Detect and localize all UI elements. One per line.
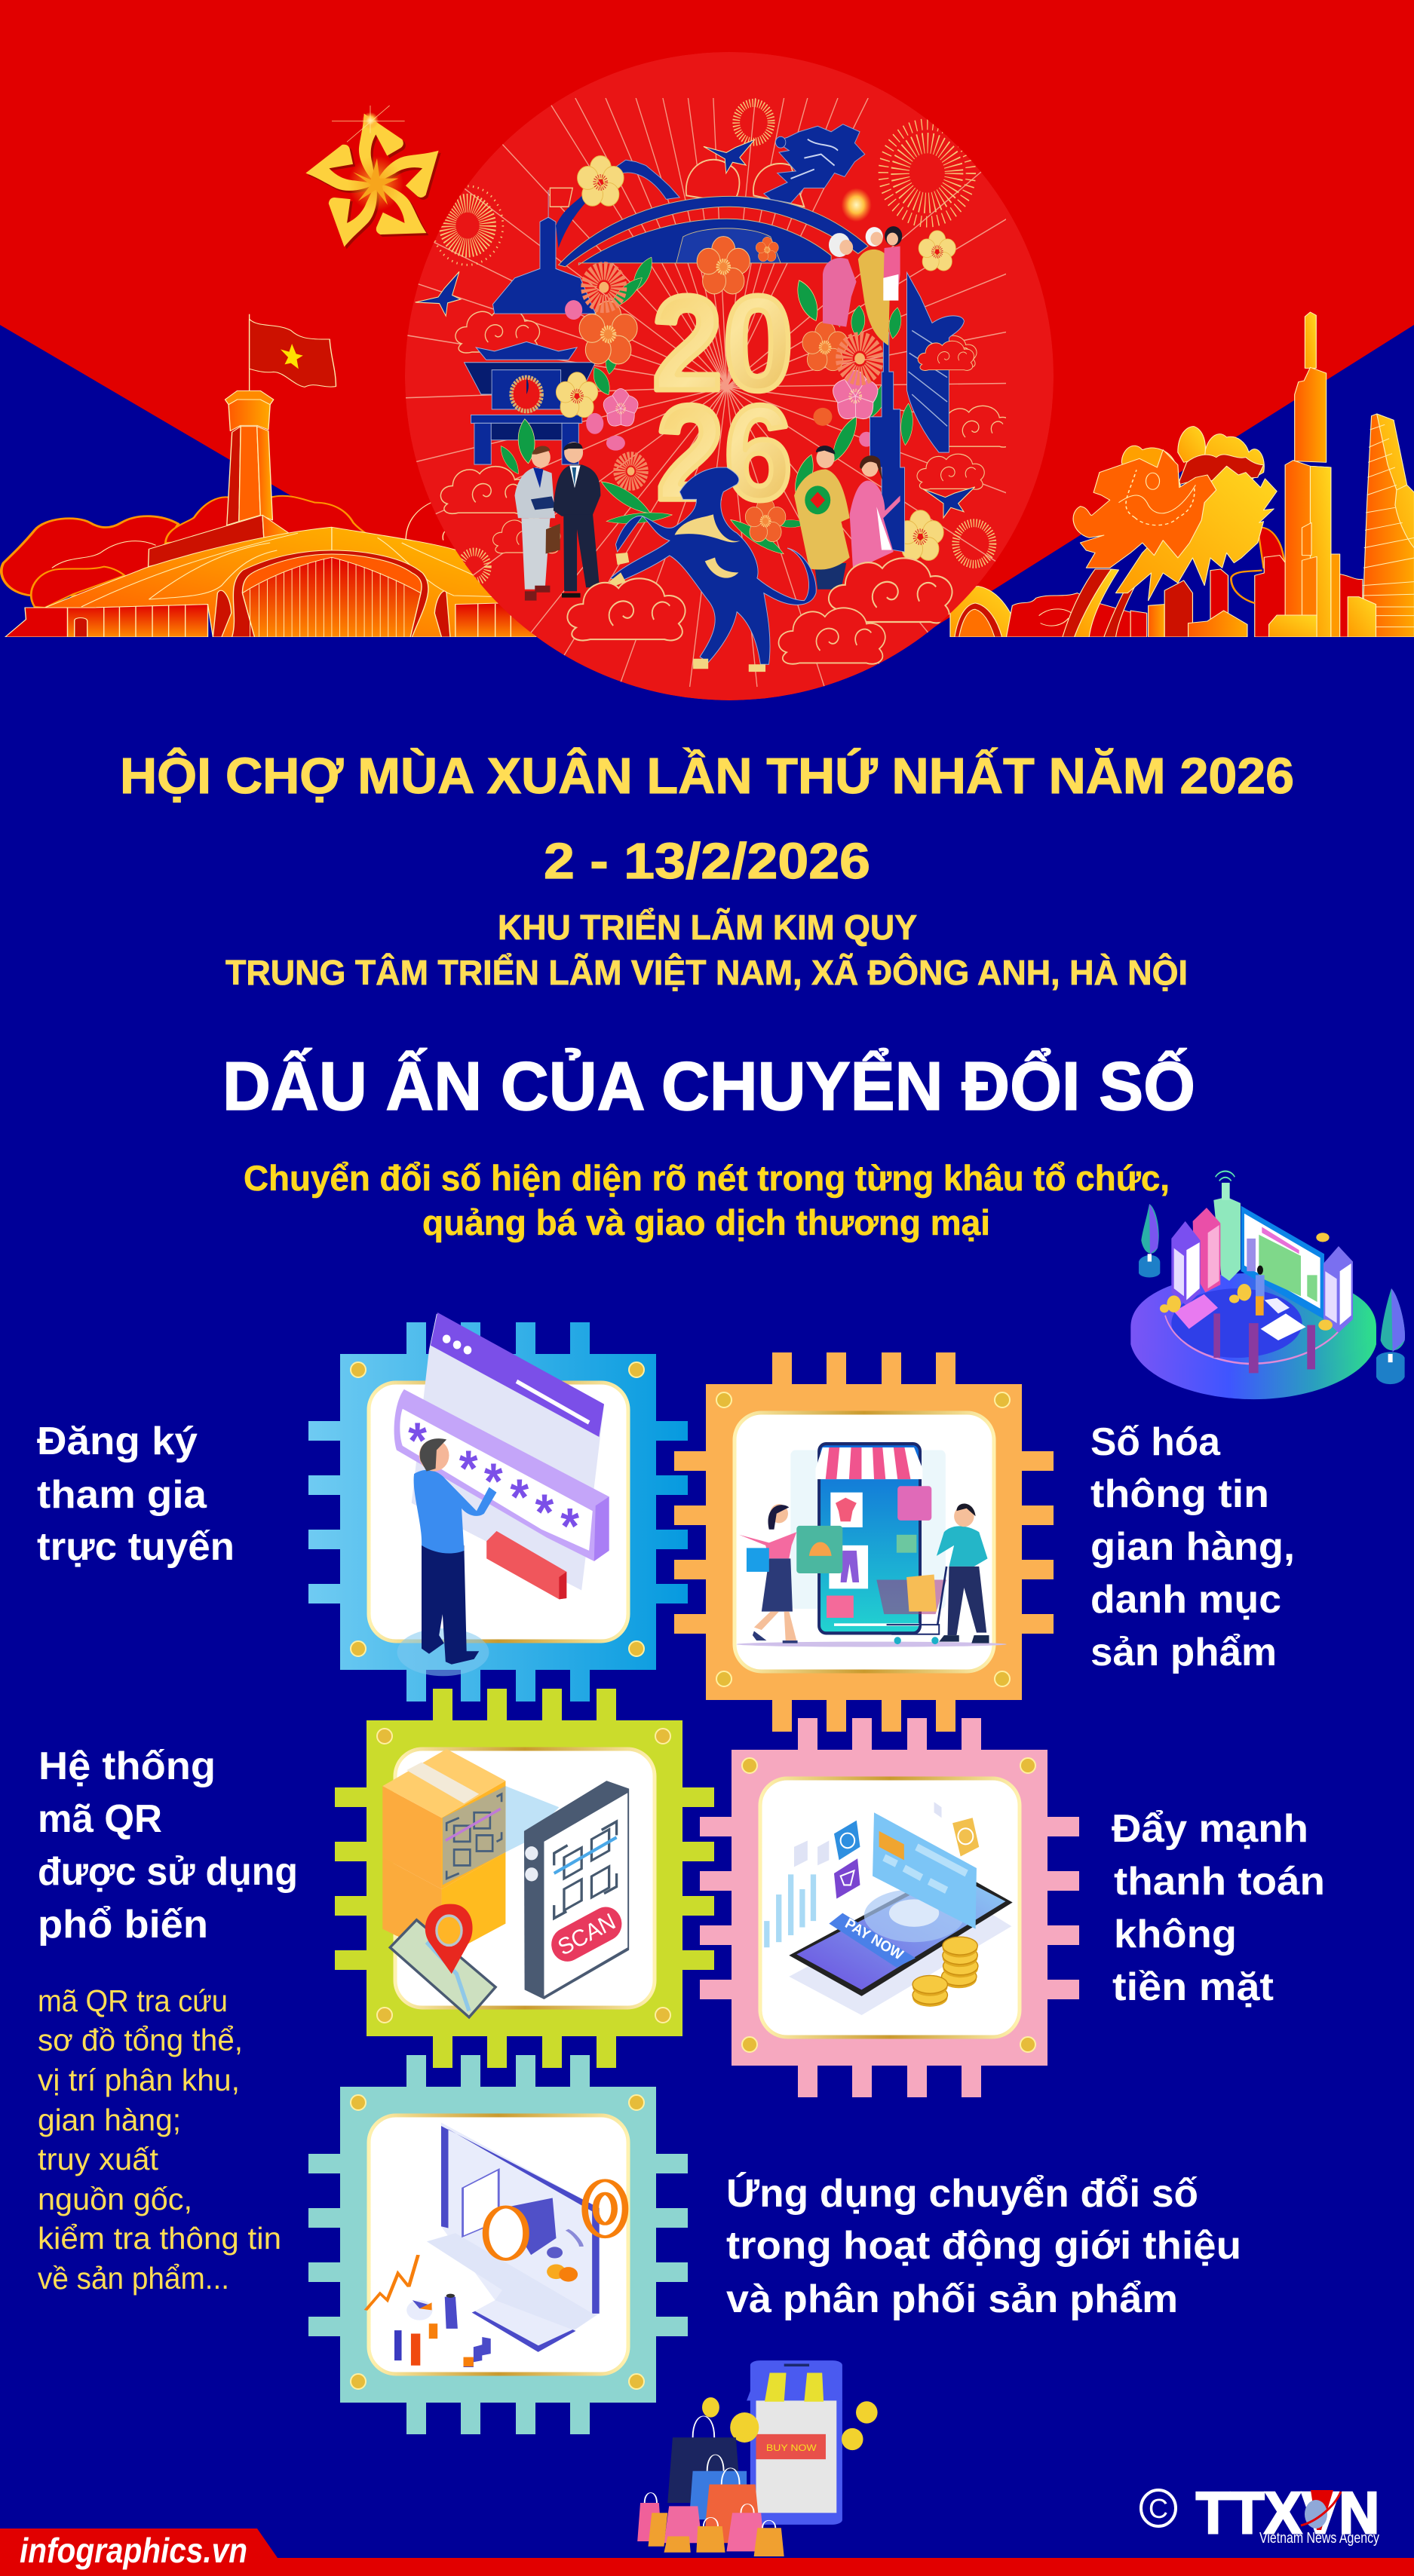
title: fair name: HỘI CHỢ MÙA XUÂN LẦN THỨ NHẤT NĂM 2026 [120, 748, 1294, 804]
icon: online registration person with password form [394, 1313, 609, 1676]
label: digitised stalls: Số hóa [1090, 1420, 1221, 1464]
label: product promotion: Ứng dụng chuyển đổi số [726, 2172, 1198, 2216]
label: cashless payment: không [1114, 1913, 1237, 1956]
arch roof of the exhibition centre [559, 196, 868, 267]
note: QR code uses [38, 1983, 281, 2296]
landmark: flag tower and exhibition hall (left skyline) [2, 314, 540, 637]
businessmen [514, 442, 600, 601]
main heading: DẤU ẤN CỦA CHUYỂN ĐỔI SỐ [222, 1048, 1195, 1125]
flag tower, blue [492, 190, 596, 314]
chip frame: lime [335, 1689, 714, 2068]
couple in ao dai [794, 446, 900, 590]
date: 2 - 13/2/2026 [544, 833, 870, 890]
label: digitised stalls: danh mục [1090, 1578, 1281, 1622]
intro text: Chuyển đổi số hiện diện rõ nét trong từng khâu tổ chức, [244, 1158, 1170, 1198]
venue: KHU TRIỂN LÃM KIM QUY [498, 908, 917, 947]
label: QR code system: phổ biến [38, 1903, 208, 1947]
note: QR code uses: sơ đồ tổng thể, [38, 2023, 243, 2057]
label: online registration [37, 1420, 235, 1569]
landmark: lion head and towers (right skyline) [950, 312, 1414, 637]
icon: online registration person with password form: * [560, 1498, 580, 1554]
label: cashless payment [1112, 1807, 1325, 2009]
icon: isometric smart city platform [1130, 1172, 1405, 1399]
horse [611, 467, 816, 664]
icon: shopping phone, bags and coins: BUY NOW [766, 2443, 817, 2453]
icon: online storefront phone with shoppers [737, 1444, 1007, 1647]
clouds in front [567, 578, 686, 641]
note: QR code uses: mã QR tra cứu [38, 1983, 228, 2018]
icon: QR scan parcel and phone [382, 1749, 629, 2017]
family: grandparents and child [823, 226, 902, 345]
label: product promotion: trong hoạt động giới thiệu [726, 2224, 1241, 2268]
note: QR code uses: về sản phẩm... [38, 2261, 229, 2296]
year numerals [654, 293, 790, 504]
icon: digital marketing monitor with megaphone [366, 2123, 625, 2367]
chip frame: pink [700, 1718, 1079, 2097]
intro text [244, 1158, 1170, 1242]
icon: online registration person with password form: * [510, 1469, 529, 1526]
icon: online registration person with password form: * [459, 1441, 478, 1497]
label: cashless payment: thanh toán [1114, 1860, 1325, 1904]
label: cashless payment: Đẩy mạnh [1112, 1807, 1308, 1851]
header red banner with V cut [0, 0, 1414, 637]
venue [225, 908, 1188, 992]
icon: shopping phone, bags and coins [637, 2360, 878, 2556]
chip frame: teal [308, 2055, 688, 2434]
logo: TTXVN with copyright mark: TTXVN [1196, 2480, 1379, 2546]
towers, blue [870, 272, 964, 552]
chip frame: orange [674, 1352, 1054, 1732]
logo: TTXVN with copyright mark: Vietnam News Agency [1259, 2530, 1379, 2547]
label: digitised stalls [1090, 1420, 1295, 1674]
icon: mobile payment with card and coins: PAY NOW [842, 1916, 906, 1964]
label: online registration: Đăng ký [37, 1420, 198, 1463]
note: QR code uses: kiểm tra thông tin [38, 2221, 281, 2256]
icon: online registration person with password form: * [535, 1484, 554, 1540]
icon: online registration person with password form: * [484, 1453, 503, 1509]
note: QR code uses: truy xuất [38, 2142, 159, 2176]
footer bar with site name [0, 2529, 1414, 2576]
note: QR code uses: gian hàng; [38, 2103, 181, 2137]
main circle illustration: 2026 festival artwork [400, 52, 1054, 700]
label: online registration: tham gia [37, 1473, 207, 1517]
label: product promotion: và phân phối sản phẩm [726, 2277, 1178, 2321]
chip frame: blue [308, 1322, 688, 1702]
label: product promotion [726, 2172, 1241, 2321]
logo: TTXVN with copyright mark: C [1149, 2493, 1168, 2524]
wreath leaves [633, 256, 652, 291]
icon: QR scan parcel and phone: SCAN [554, 1909, 619, 1961]
dragon [612, 124, 865, 203]
footer bar with site name: infographics.vn [20, 2531, 247, 2570]
label: QR code system: Hệ thống [38, 1744, 216, 1788]
year numerals: 26 [656, 378, 793, 528]
label: QR code system: được sử dụng [38, 1850, 298, 1894]
label: digitised stalls: sản phẩm [1090, 1631, 1277, 1674]
label: digitised stalls: gian hàng, [1090, 1525, 1295, 1569]
label: QR code system: mã QR [38, 1797, 162, 1841]
venue: TRUNG TÂM TRIỂN LÃM VIỆT NAM, XÃ ĐÔNG ANH, HÀ NỘI [225, 953, 1188, 992]
note: QR code uses: vị trí phân khu, [38, 2063, 240, 2097]
intro text: quảng bá và giao dịch thương mại [422, 1202, 990, 1242]
label: cashless payment: tiền mặt [1112, 1965, 1274, 2009]
icon: mobile payment with card and coins [764, 1802, 1013, 2015]
label: digitised stalls: thông tin [1090, 1472, 1269, 1516]
emblem: five-petal gold flower [304, 106, 453, 259]
icon: online registration person with password form: * [408, 1412, 427, 1469]
year numerals: 20 [652, 268, 793, 419]
note: QR code uses: nguồn gốc, [38, 2182, 192, 2216]
label: online registration: trực tuyến [37, 1525, 235, 1569]
temple pavilion [465, 342, 596, 464]
label: QR code system [38, 1744, 298, 1947]
